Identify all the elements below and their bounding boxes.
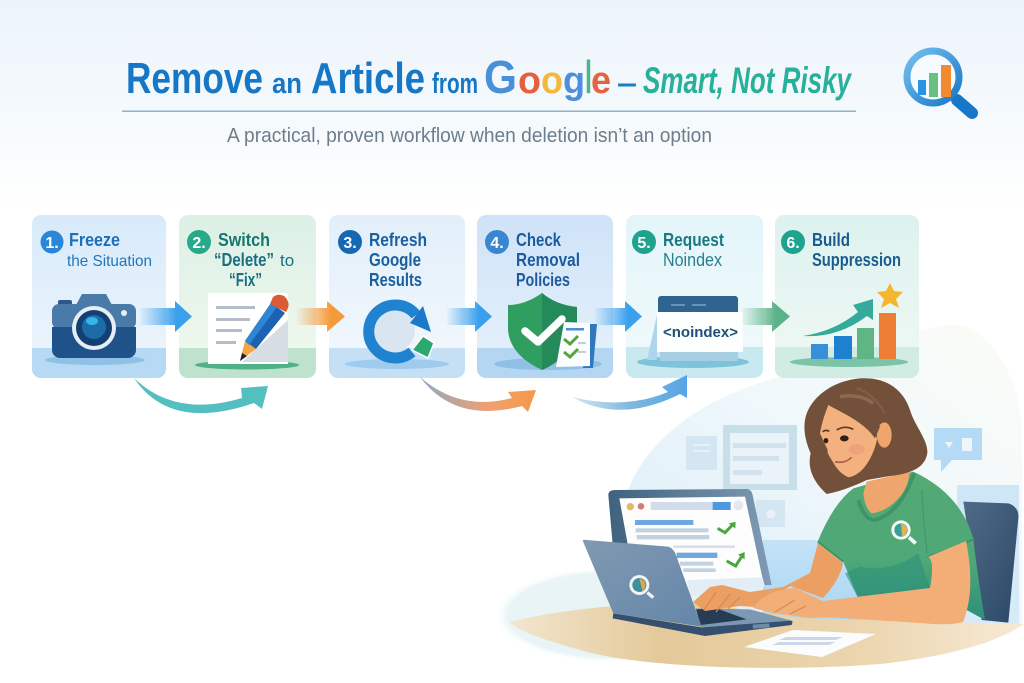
monitor xyxy=(608,489,772,597)
icon: document and pencil xyxy=(195,293,299,370)
step number 2: 2. xyxy=(192,235,206,252)
background wall cards xyxy=(686,425,982,527)
step heading: Switch xyxy=(218,230,270,250)
panel: step 1 freeze xyxy=(32,215,166,378)
panel: step 2 switch xyxy=(179,215,316,378)
panel: step 6 suppression xyxy=(775,215,919,378)
head xyxy=(804,378,927,494)
icon: shield and checklist xyxy=(494,293,602,370)
icon: growth chart and star xyxy=(790,283,908,367)
step heading: to xyxy=(280,251,294,270)
title: Article xyxy=(311,54,425,103)
icon: browser window: <noindex> xyxy=(663,324,738,341)
title: Remove xyxy=(126,54,263,103)
title: g xyxy=(563,60,585,102)
step heading xyxy=(516,230,580,290)
step number 2 xyxy=(187,230,211,254)
step heading: Noindex xyxy=(663,250,722,270)
icon: refresh arrow xyxy=(345,305,449,369)
step number 4 xyxy=(485,230,509,254)
arrow: step 5 to 6 xyxy=(742,301,790,332)
step heading xyxy=(67,230,152,270)
arrow: step 3 to 4 xyxy=(447,301,492,332)
scene background xyxy=(494,325,1022,663)
step number 5: 5. xyxy=(637,235,651,252)
title: – xyxy=(617,67,637,100)
step heading: Google xyxy=(369,250,421,270)
step heading: the Situation xyxy=(67,253,152,270)
step number 4: 4. xyxy=(490,235,504,252)
arrow: step 1 to 2 xyxy=(140,301,192,332)
step heading: Check xyxy=(516,230,562,250)
curved arrow: step 3 to 4 xyxy=(420,377,536,412)
step number 1: 1. xyxy=(45,235,59,252)
step heading: Request xyxy=(663,230,724,250)
panel: step 4 policies xyxy=(477,215,613,378)
title: G xyxy=(484,51,517,103)
step heading xyxy=(369,230,427,290)
step heading: Policies xyxy=(516,270,570,290)
title: Smart, Not Risky xyxy=(643,60,853,101)
arms and hands xyxy=(693,541,970,624)
title: l xyxy=(585,51,592,103)
step number 6 xyxy=(781,230,805,254)
title: e xyxy=(591,60,611,102)
arrow: step 2 to 3 xyxy=(297,301,345,332)
step number 5 xyxy=(632,230,656,254)
step heading xyxy=(812,230,901,270)
subtitle: A practical, proven workflow when deletion isn’t an option xyxy=(227,125,712,147)
step heading: “Fix” xyxy=(229,270,262,290)
step heading xyxy=(663,230,724,270)
laptop xyxy=(583,540,793,636)
curved arrow: step 1 to 2 xyxy=(134,378,268,413)
icon: browser window xyxy=(637,296,749,368)
arrow: step 4 to 5 xyxy=(595,301,642,332)
panel: step 5 noindex xyxy=(626,215,763,378)
title: o xyxy=(541,60,563,102)
title: from xyxy=(432,68,478,100)
step heading: Removal xyxy=(516,250,580,270)
step heading: Results xyxy=(369,270,422,290)
panel: step 3 refresh xyxy=(329,215,465,378)
title xyxy=(126,51,853,103)
step heading: Suppression xyxy=(812,250,901,270)
step heading: “Delete” xyxy=(214,250,274,270)
step number 6: 6. xyxy=(786,235,800,252)
step number 3 xyxy=(338,230,362,254)
chair xyxy=(963,502,1018,623)
step heading: Refresh xyxy=(369,230,427,250)
illustration: person at laptop xyxy=(494,325,1024,670)
table xyxy=(509,603,1024,668)
paper xyxy=(744,630,876,657)
step heading xyxy=(214,230,294,290)
step number 3: 3. xyxy=(343,235,357,252)
torso with green t-shirt xyxy=(818,472,985,620)
step heading: Build xyxy=(812,230,850,250)
step number 1 xyxy=(40,230,64,254)
title: o xyxy=(518,60,541,102)
step heading: Freeze xyxy=(69,230,120,250)
curved arrow: step 4 to 5 xyxy=(572,375,687,410)
title: an xyxy=(272,68,302,100)
icon: magnifier with bar chart xyxy=(907,51,972,113)
icon: camera xyxy=(45,294,145,365)
